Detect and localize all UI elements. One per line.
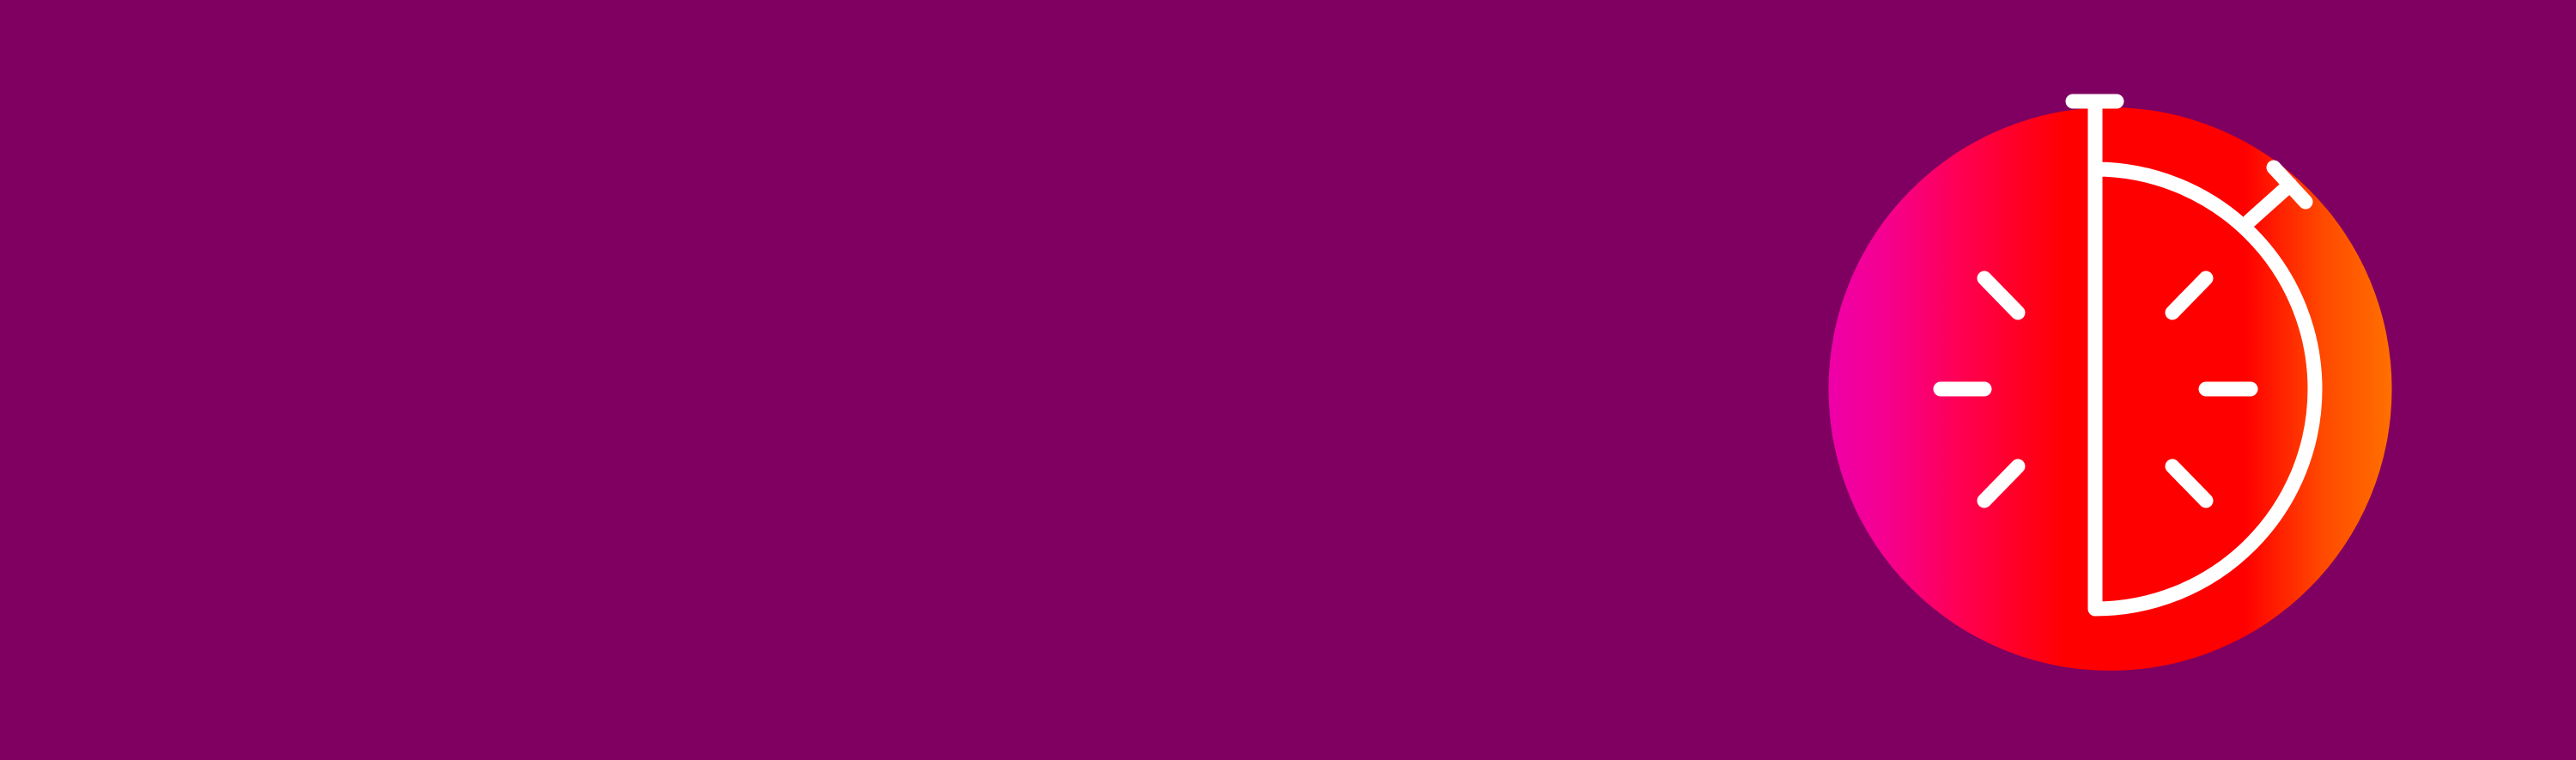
icon: gradient circle xyxy=(1829,107,2392,671)
stopwatch side button xyxy=(2250,167,2306,221)
stopwatch top button xyxy=(2073,94,2117,108)
dial tick marks xyxy=(1941,278,2251,501)
icon: stopwatch xyxy=(1941,101,2315,609)
stopwatch half dial outline xyxy=(2095,101,2315,609)
